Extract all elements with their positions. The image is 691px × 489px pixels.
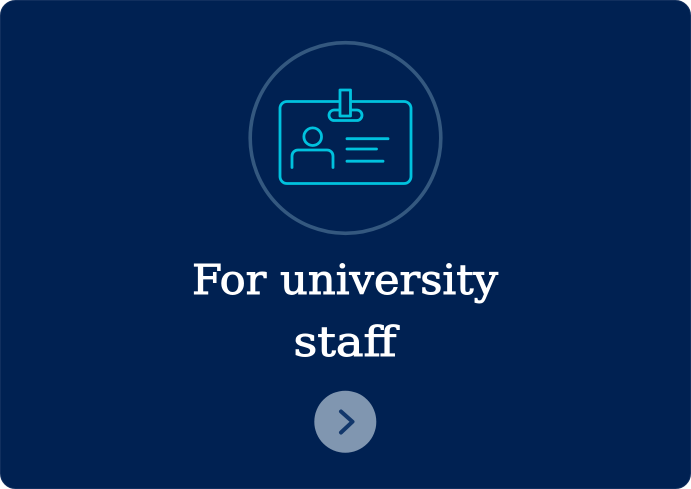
badge clip (329, 90, 362, 120)
icon: chevron (341, 412, 352, 432)
person (292, 128, 333, 168)
button: next arrow (314, 391, 376, 453)
heading (192, 256, 499, 366)
icon: ID badge in circle (250, 43, 441, 233)
text lines (347, 139, 388, 161)
heading: For university (192, 256, 499, 304)
icon ring (250, 43, 441, 233)
badge body (280, 102, 411, 184)
heading: staff (294, 318, 400, 366)
